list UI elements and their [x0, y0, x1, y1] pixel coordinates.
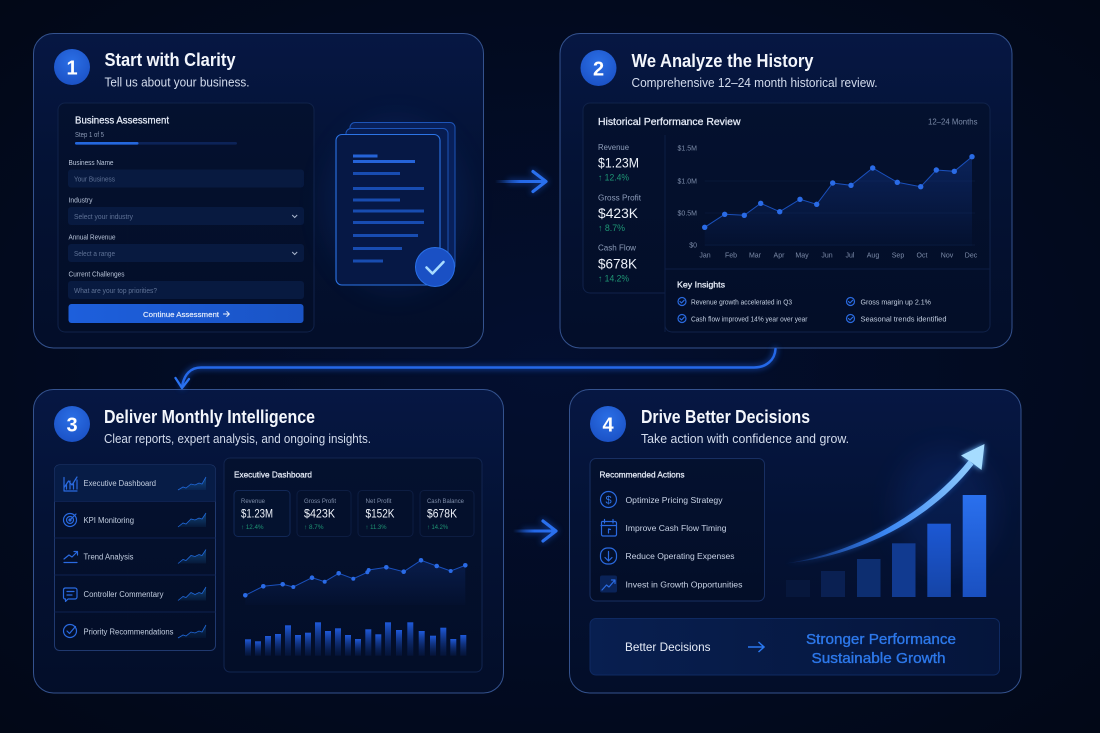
metric: cash flow: $678K: [598, 256, 638, 272]
line chart: revenue by month: $0.5M: [678, 210, 697, 218]
arrow: rising growth curve: [785, 444, 984, 564]
line chart: revenue by month: Sep: [892, 252, 904, 260]
action: optimize pricing: Optimize Pricing Strategy: [626, 495, 723, 505]
row: trend analysis: Trend Analysis: [84, 552, 134, 562]
step 1 heading: Start with Clarity: [104, 50, 236, 70]
metric: revenue: ↑ 12.4%: [598, 172, 629, 182]
field: annual revenue: Select a range: [74, 251, 115, 258]
field: business name: Your Business: [74, 176, 115, 184]
kpi: cash balance: Cash Balance: [427, 498, 464, 505]
row: controller commentary: [63, 587, 206, 602]
line chart: revenue by month: Mar: [749, 252, 762, 260]
step 4 heading: Drive Better Decisions: [641, 407, 810, 427]
step 2 number badge: [580, 50, 616, 86]
step 1 subheading: Tell us about your business.: [104, 74, 250, 90]
form: business assessment: Annual Revenue: [68, 234, 116, 242]
metric: gross profit: $423K: [598, 205, 639, 221]
field: industry: Select your industry: [74, 214, 133, 221]
step 3 number badge: 3: [66, 414, 78, 436]
arrow: step 2 to step 3 connector: [176, 349, 776, 388]
line chart: revenue by month: Oct: [917, 252, 927, 260]
action: reduce expenses: Reduce Operating Expenses: [626, 551, 734, 561]
form: business assessment: [58, 103, 314, 332]
key insights: Gross margin up 2.1%: [860, 299, 931, 306]
form: business assessment: Current Challenges: [68, 272, 125, 278]
line chart: revenue by month: $1.0M: [678, 178, 697, 186]
card: historical performance review: 12–24 Months: [928, 118, 978, 126]
kpi: revenue: $1.23M: [241, 506, 273, 520]
card: executive dashboard: [224, 458, 482, 672]
field: business name: [68, 170, 304, 188]
step 4 number badge: 4: [602, 414, 614, 436]
menu: report list: [54, 465, 216, 650]
kpi: net profit: ↑ 11.3%: [366, 524, 387, 531]
arrow: better decisions to outcome: [748, 642, 764, 652]
action: optimize pricing: $: [605, 494, 612, 506]
row: executive dashboard: [64, 477, 206, 491]
action: cash flow timing: Improve Cash Flow Timing: [626, 523, 727, 533]
line chart: revenue by month: Nov: [941, 252, 954, 260]
row: trend analysis: [64, 550, 206, 564]
progress bar: [75, 142, 237, 145]
panel: step 3 deliver monthly intelligence: [34, 390, 504, 693]
kpi: gross profit: Gross Profit: [304, 498, 336, 505]
kpi: gross profit: ↑ 8.7%: [304, 524, 324, 531]
kpi: cash balance: $678K: [427, 506, 457, 520]
line chart: revenue by month: Aug: [867, 252, 879, 260]
key insights: Cash flow improved 14% year over year: [691, 316, 808, 323]
field: industry: [68, 207, 304, 225]
line chart: revenue by month: Jul: [846, 252, 855, 260]
line chart: revenue by month: May: [795, 252, 809, 260]
metric: gross profit: ↑ 8.7%: [598, 223, 625, 233]
step 4 number badge: [590, 406, 626, 442]
line chart: revenue by month: $1.5M: [678, 146, 697, 152]
metric: cash flow: ↑ 14.2%: [598, 274, 629, 284]
line chart: revenue by month: Feb: [725, 252, 737, 260]
metric: revenue: [598, 142, 639, 182]
field: current challenges: What are your top priorities?: [74, 288, 157, 295]
kpi: revenue: ↑ 12.4%: [241, 524, 264, 531]
key insights: [677, 280, 947, 323]
action: reduce expenses: [600, 548, 734, 564]
step 2 heading: We Analyze the History: [632, 51, 814, 71]
row: priority recommendations: Priority Recommendations: [84, 628, 174, 636]
button: continue assessment: [68, 304, 304, 323]
kpi: cash balance: ↑ 14.2%: [427, 524, 448, 531]
card: historical performance review: Historical Performance Review: [598, 117, 741, 128]
icon: stacked documents with check: [326, 120, 466, 290]
row: controller commentary: Controller Commentary: [84, 590, 164, 599]
action: invest in growth: Invest in Growth Opportunities: [626, 580, 742, 590]
card: executive dashboard: Executive Dashboard: [234, 470, 312, 480]
row: kpi monitoring: KPI Monitoring: [84, 516, 134, 525]
form: business assessment: Industry: [68, 198, 93, 204]
action: cash flow timing: [601, 520, 727, 536]
strip: better decisions outcome: Better Decisions: [625, 640, 710, 654]
key insights: Key Insights: [677, 280, 725, 290]
button: continue assessment: Continue Assessment: [143, 310, 220, 319]
line chart: revenue by month: [665, 135, 990, 332]
row: kpi monitoring: [64, 513, 206, 527]
key insights: Revenue growth accelerated in Q3: [691, 299, 792, 306]
metric: gross profit: Gross Profit: [598, 192, 642, 202]
arrow: step 3 to step 4: [513, 521, 556, 541]
key insights: Seasonal trends identified: [860, 316, 947, 323]
strip: better decisions outcome: Sustainable Growth: [812, 651, 946, 667]
kpi: net profit: $152K: [366, 506, 394, 520]
kpi: cash balance: [420, 490, 474, 536]
line chart: revenue by month: Apr: [774, 252, 785, 260]
step 3 number badge: [54, 406, 90, 442]
kpi: gross profit: $423K: [304, 506, 335, 520]
line chart: revenue by month: $0: [689, 242, 697, 250]
step 3 subheading: Clear reports, expert analysis, and ongoing insights.: [104, 431, 371, 446]
action: invest in growth: [600, 576, 742, 592]
metric: cash flow: Cash Flow: [598, 242, 637, 252]
field: annual revenue: [68, 244, 304, 262]
panel: step 2 analyze the history: [560, 34, 1012, 348]
step 4 subheading: Take action with confidence and grow.: [641, 431, 849, 446]
step 1 number badge: 1: [66, 58, 78, 80]
line chart: revenue by month: Jan: [699, 252, 711, 260]
row: priority recommendations: [64, 624, 206, 638]
kpi: revenue: Revenue: [241, 498, 265, 505]
form: business assessment: Business Assessment: [75, 116, 169, 126]
strip: better decisions outcome: [590, 618, 1000, 675]
card: recommended actions: Recommended Actions: [600, 470, 684, 480]
bar chart: dashboard monthly bars: [245, 622, 466, 656]
metric: gross profit: [598, 192, 642, 233]
kpi: net profit: Net Profit: [366, 498, 392, 505]
step 1 number badge: [54, 49, 90, 85]
step 3 heading: Deliver Monthly Intelligence: [104, 407, 315, 427]
action: optimize pricing: [600, 492, 723, 508]
metric: cash flow: [598, 242, 638, 284]
card: historical performance review: [583, 103, 990, 332]
panel: step 4 drive better decisions: [570, 390, 1021, 693]
panel: step 1 start with clarity: [34, 34, 484, 348]
form: business assessment: Business Name: [68, 160, 114, 167]
line chart: revenue by month: Dec: [965, 252, 978, 260]
line chart: dashboard trend: [243, 558, 468, 605]
card: recommended actions: [590, 458, 764, 601]
row: executive dashboard: Executive Dashboard: [84, 479, 156, 488]
bar chart: growth with rising arrow: [785, 444, 995, 597]
form: business assessment: Step 1 of 5: [75, 132, 104, 139]
kpi: net profit: [358, 490, 413, 536]
metric: revenue: Revenue: [598, 142, 629, 152]
field: current challenges: [68, 281, 304, 299]
step 2 subheading: Comprehensive 12–24 month historical review.: [632, 75, 878, 90]
line chart: revenue by month: Jun: [821, 252, 833, 260]
step 2 number badge: 2: [593, 58, 604, 80]
strip: better decisions outcome: Stronger Performance: [806, 632, 956, 648]
metric: revenue: $1.23M: [598, 154, 639, 170]
arrow: step 1 to step 2: [495, 172, 546, 192]
kpi: gross profit: [297, 490, 351, 536]
kpi: revenue: [234, 490, 290, 536]
